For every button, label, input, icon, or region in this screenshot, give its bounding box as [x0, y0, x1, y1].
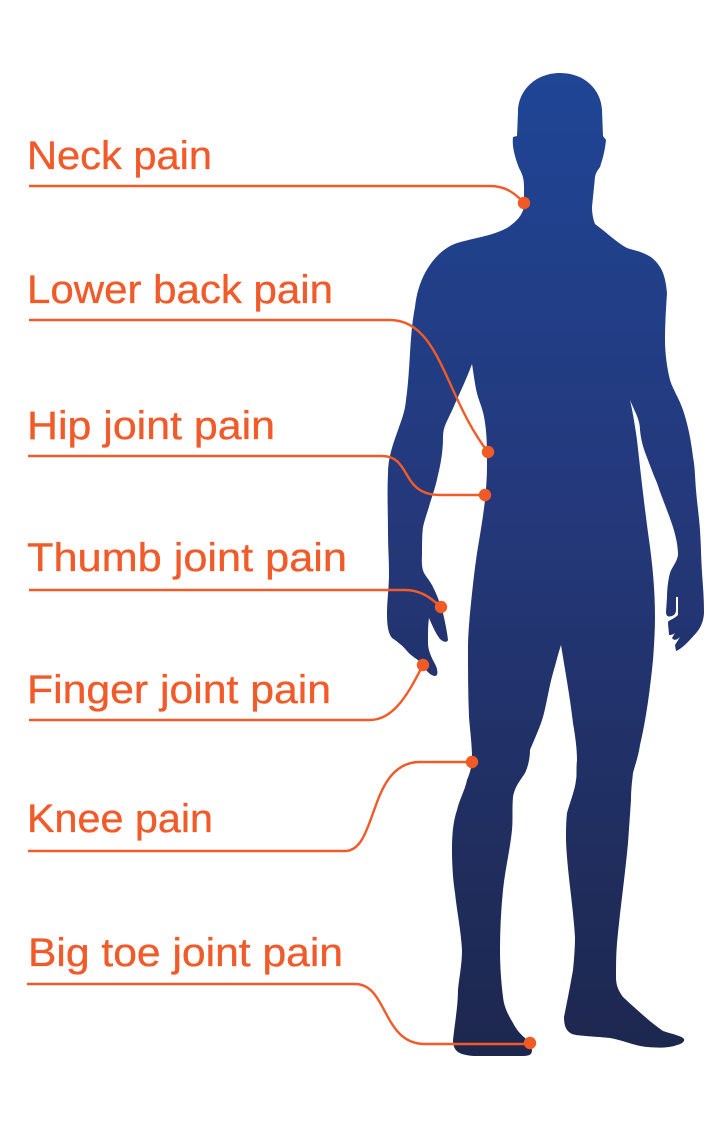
label: thumb joint pain: Thumb joint pain [27, 536, 347, 580]
label: lower back pain: Lower back pain [27, 268, 333, 312]
label: hip joint pain [27, 404, 491, 501]
label: hip joint pain: Hip joint pain [27, 404, 275, 448]
label: big toe joint pain [27, 931, 536, 1049]
label: thumb joint pain [27, 536, 447, 613]
label: knee pain [27, 756, 478, 851]
label: finger joint pain: Finger joint pain [27, 668, 331, 712]
label: lower back pain [27, 268, 494, 458]
label: knee pain: Knee pain [27, 797, 213, 841]
human body silhouette [387, 73, 704, 1056]
label: neck pain [27, 134, 530, 209]
label: finger joint pain [27, 659, 429, 720]
label: big toe joint pain: Big toe joint pain [28, 931, 343, 975]
label: neck pain: Neck pain [27, 134, 212, 178]
